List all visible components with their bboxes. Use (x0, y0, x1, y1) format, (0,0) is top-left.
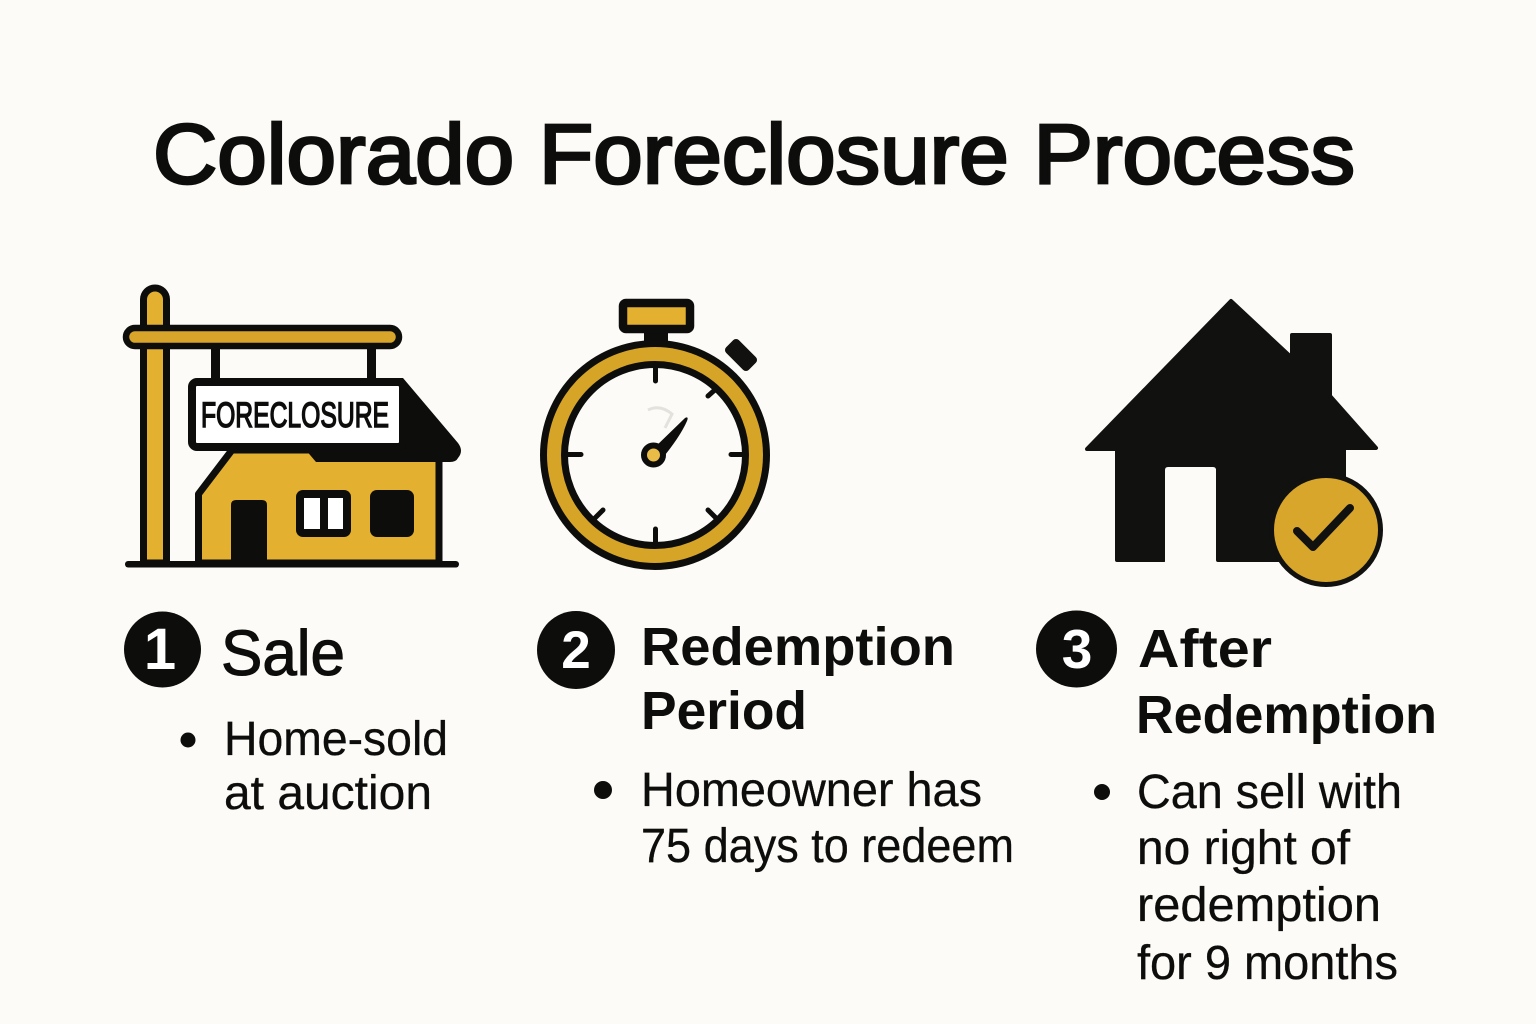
number badge 3: 3 (1062, 618, 1092, 680)
title: Colorado Foreclosure Process (153, 107, 1355, 201)
step 1 (124, 612, 448, 820)
bullet list: Homeowner has (641, 764, 982, 817)
number badge 2: 2 (561, 621, 591, 680)
top button (623, 303, 690, 329)
heading: Redemption Period: Period (641, 681, 807, 741)
bullet list (594, 764, 1014, 873)
sign post (144, 288, 166, 563)
bullet list: for 9 months (1137, 937, 1398, 990)
sign hangers (211, 345, 376, 383)
faint smudge on dial (648, 408, 672, 428)
tick marks (567, 366, 746, 543)
icon: foreclosure sign and house (125, 288, 461, 568)
hub (644, 446, 663, 464)
check badge (1272, 476, 1380, 584)
house silhouette (1087, 301, 1376, 560)
bullet list: Can sell with (1137, 766, 1402, 819)
heading: Sale: Sale (221, 617, 345, 689)
heading: After Redemption: After (1138, 619, 1272, 679)
icon: stopwatch (540, 303, 770, 570)
dark window (370, 490, 414, 537)
hand (652, 417, 688, 460)
heading: After Redemption (1136, 619, 1437, 745)
door (231, 500, 267, 563)
bullet list: 75 days to redeem (641, 820, 1014, 873)
gold ring (547, 347, 763, 563)
stem (644, 328, 668, 346)
icon: house with check badge (1087, 301, 1380, 584)
dial face (564, 364, 746, 546)
bullet list (1094, 766, 1402, 990)
heading: Redemption Period (641, 617, 955, 741)
bullet list: no right of (1137, 822, 1351, 875)
bullet list (180, 713, 448, 820)
number badge 3 (1036, 610, 1117, 688)
step 3 (1036, 610, 1437, 990)
sign board (192, 382, 403, 447)
door opening (1165, 467, 1216, 562)
bullet list: redemption (1137, 879, 1381, 932)
heading: Redemption Period: Redemption (641, 617, 955, 677)
window with panes (296, 490, 351, 537)
number badge 1 (124, 612, 201, 688)
house roof (300, 378, 461, 462)
house body (198, 450, 439, 563)
check mark (1297, 508, 1350, 547)
bullet list: at auction (224, 767, 432, 820)
sign label: FORECLOSURE (201, 396, 389, 435)
step 2 (537, 611, 1014, 873)
outer ring (540, 340, 770, 570)
number badge 2 (537, 611, 615, 689)
heading: After Redemption: Redemption (1136, 685, 1437, 745)
crossbar (126, 328, 399, 346)
side button (723, 337, 759, 373)
bullet list: Home-sold (224, 713, 448, 766)
number badge 1: 1 (144, 617, 176, 682)
ground line (125, 561, 459, 568)
